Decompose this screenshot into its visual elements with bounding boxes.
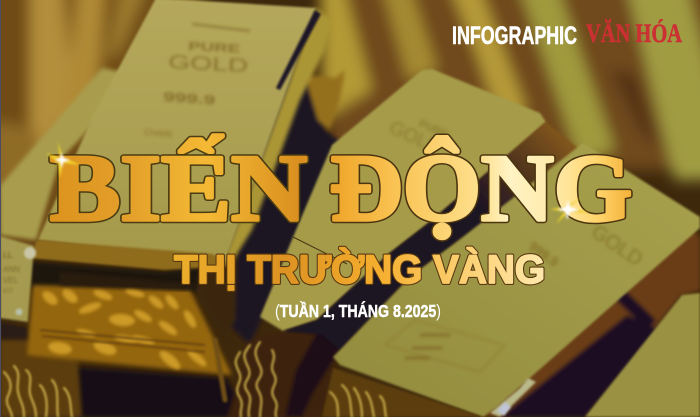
left bar stamp text: LL (3, 251, 13, 260)
left bar stamp text (3, 251, 20, 295)
rippled gold ridges bottom (4, 340, 386, 417)
header label: infographic: INFOGRAPHIC (452, 22, 577, 50)
background stripes top right (320, 0, 700, 180)
bar stamp text: GOLD (587, 221, 647, 271)
dark band between middle and front bar (283, 122, 580, 350)
background stripes top left (0, 0, 200, 250)
left edge strip (0, 0, 1, 417)
gold bar bottom right (585, 293, 700, 417)
left bar stamp text: ANN (3, 265, 20, 274)
left bar stamp text: VEL (3, 276, 19, 285)
date line: (TUẦN 1, THÁNG 8.2025) (275, 300, 441, 321)
title word: động: ĐỘNG (330, 135, 632, 241)
gold bar middle (260, 69, 546, 331)
left bar stamp text: 977 (3, 289, 14, 295)
sparkle right (550, 197, 590, 224)
brand header (452, 19, 682, 50)
ripple strip under front bar (322, 368, 483, 417)
bar stamp text: CHAIN (144, 127, 173, 139)
bar stamp text: 999.9 (163, 89, 216, 108)
dark gaps between bars (30, 70, 700, 417)
bar stamp text: PURE (188, 39, 241, 56)
rippled gold bar bottom left (27, 272, 232, 375)
title word: biến: BIẾN (50, 134, 307, 241)
title word: biến: BIẾN (50, 134, 307, 241)
bar stamp text: 999.9 (526, 238, 561, 270)
lens flares (16, 247, 511, 416)
subtitle: THỊ TRƯỜNG VÀNG (174, 246, 545, 292)
gold bar top with pure gold stamp (30, 0, 332, 270)
main title (50, 134, 632, 241)
bar stamp text: PURE (417, 118, 450, 141)
bar stamp text (385, 221, 647, 372)
gold bar front (333, 143, 700, 417)
bar stamp text: GOLD (386, 117, 444, 158)
bar stamp text: GOLD (168, 52, 249, 77)
sparkle left (46, 142, 80, 178)
left gold bar (0, 68, 140, 417)
bar stamp text (144, 24, 250, 139)
subtitle: THỊ TRƯỜNG VÀNG (174, 246, 545, 292)
title word: động: ĐỘNG (330, 135, 632, 241)
